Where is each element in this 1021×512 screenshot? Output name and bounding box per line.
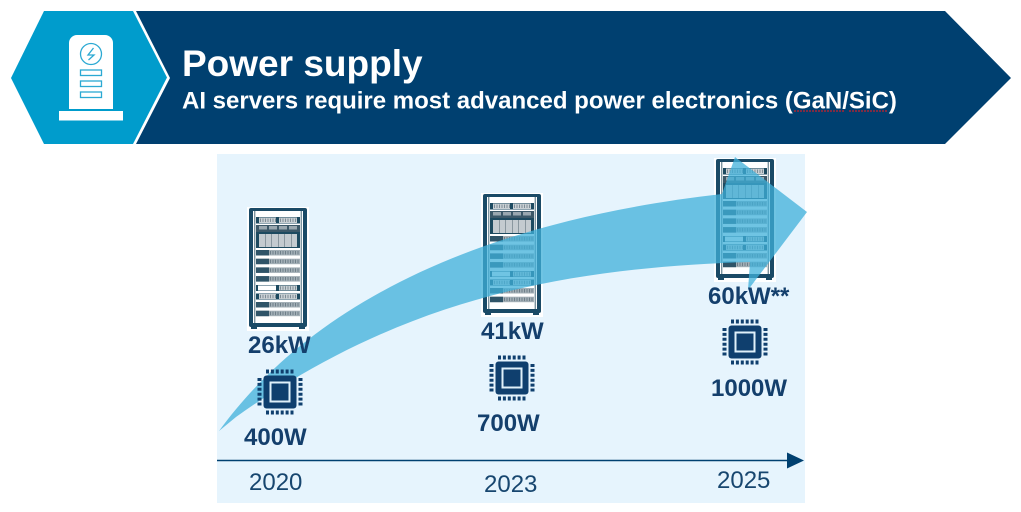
icon: power supply unit: [59, 35, 123, 120]
rack 2020: [247, 207, 309, 331]
label: 41kW: 41kW: [481, 318, 544, 345]
chip icon 2023: [492, 358, 532, 398]
panel: timeline: [217, 154, 805, 503]
title: Power supply: [182, 43, 423, 84]
year 2023: 2023: [484, 471, 537, 498]
label: 400W: 400W: [244, 424, 307, 451]
time axis arrow: [217, 452, 804, 468]
label: 700W: 700W: [477, 410, 540, 437]
growth arrow: [219, 157, 807, 431]
spell-check underline: [794, 110, 888, 112]
subtitle: AI servers require most advanced power electronics (GaN/SiC): [182, 88, 897, 114]
chip icon 2025: [724, 322, 766, 362]
year 2025: 2025: [717, 467, 770, 494]
label: 26kW: 26kW: [248, 332, 311, 359]
banner arrow: [136, 11, 1011, 144]
rack 2023: [481, 193, 543, 317]
rack 2025: [714, 158, 776, 282]
chip icon 2020: [260, 372, 300, 412]
label: 1000W: 1000W: [711, 375, 787, 402]
year 2020: 2020: [249, 469, 302, 496]
label: 60kW: 60kW**: [708, 283, 790, 310]
hexagon icon badge: [11, 11, 167, 144]
